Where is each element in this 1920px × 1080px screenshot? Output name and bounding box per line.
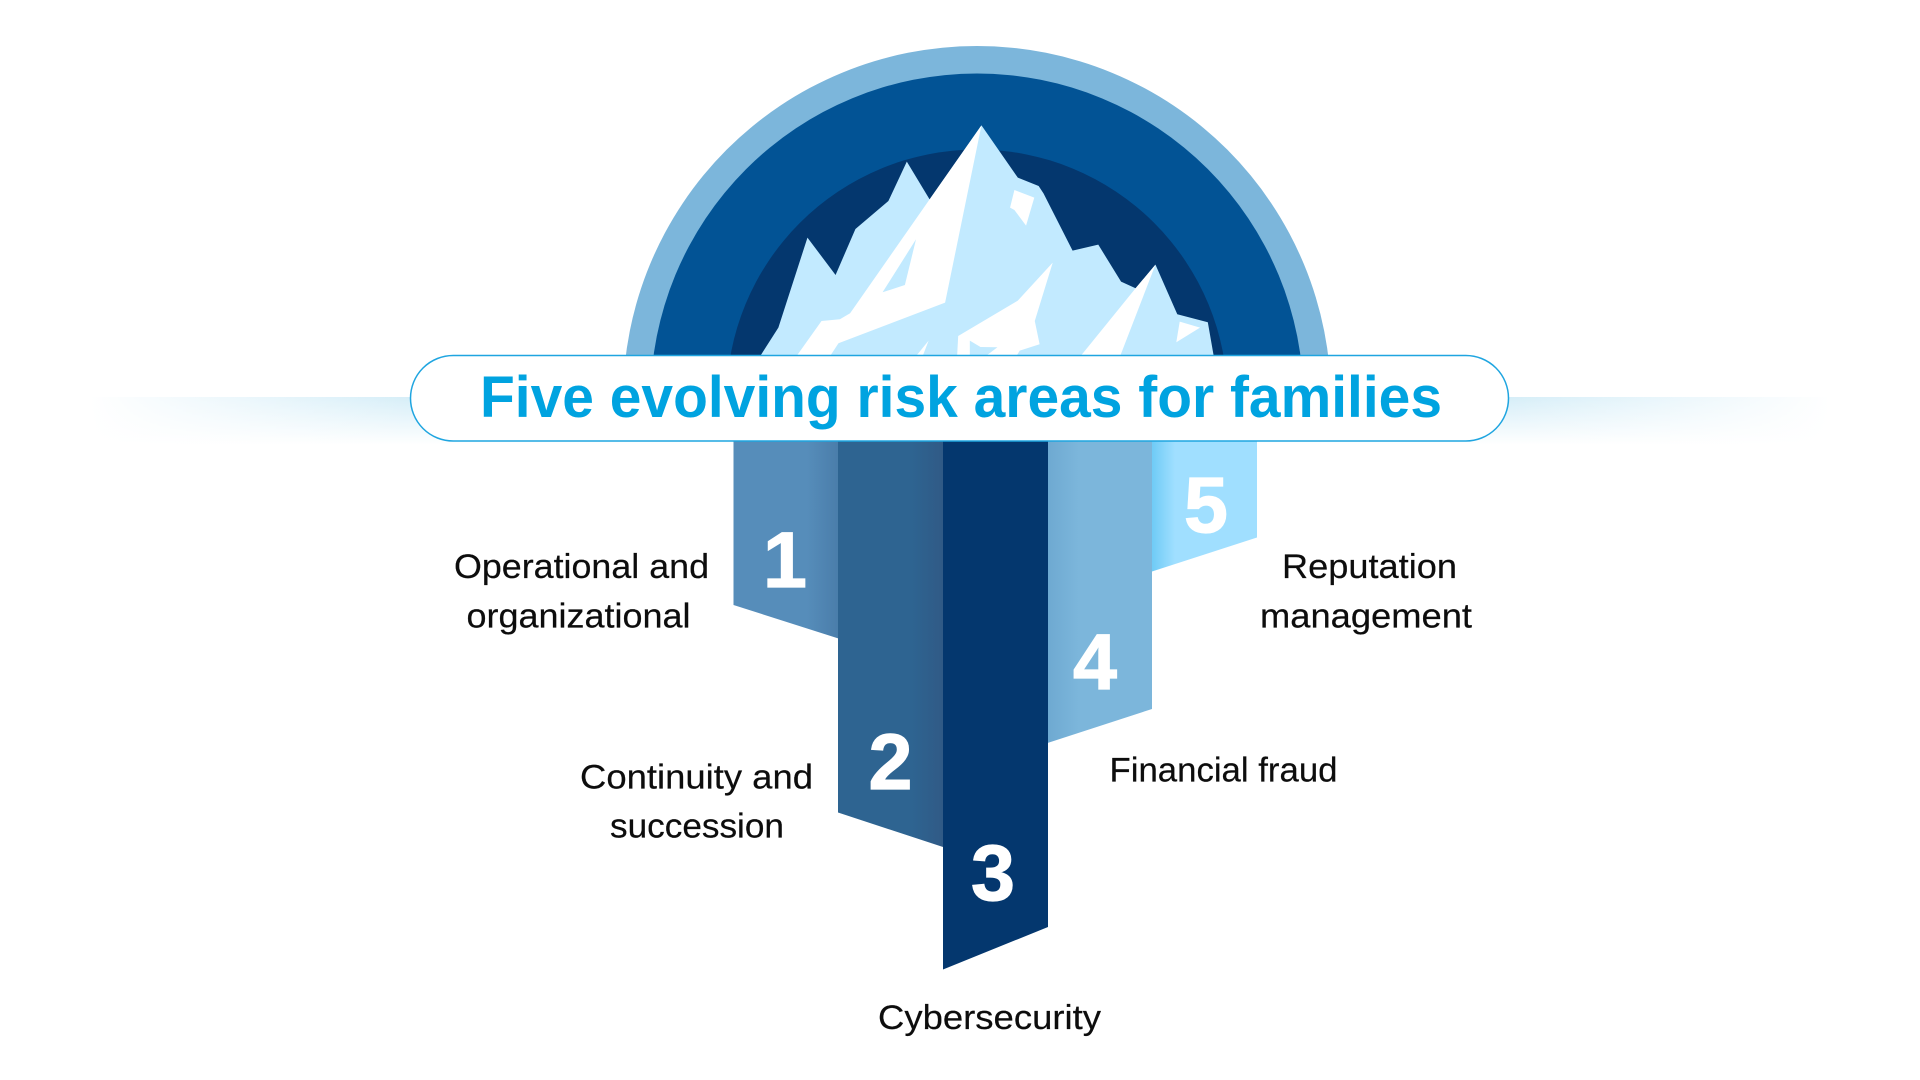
number 2: 2 <box>869 717 912 806</box>
ribbon 2 <box>838 441 943 847</box>
label: Financial fraud: Financial fraud <box>1110 752 1338 790</box>
label: Operational and organizational <box>454 548 709 636</box>
label: Operational and organizational: Operational and <box>454 548 709 586</box>
middle arc <box>654 74 1300 355</box>
number 1: 1 <box>763 515 807 604</box>
label: Cybersecurity: Cybersecurity <box>878 999 1101 1037</box>
label: Reputation management <box>1260 548 1473 636</box>
label: Reputation management: management <box>1260 598 1473 636</box>
ribbon 1 <box>734 441 838 638</box>
outer arc <box>626 46 1328 355</box>
number 4: 4 <box>1073 617 1117 706</box>
label: Continuity and succession: Continuity and <box>580 758 813 796</box>
label: Continuity and succession: succession <box>610 808 784 846</box>
number 5: 5 <box>1184 460 1228 549</box>
ribbons <box>734 441 1257 970</box>
ribbon 3 <box>943 441 1048 970</box>
dome <box>626 46 1328 355</box>
ribbon 4 <box>1048 441 1152 743</box>
title pill <box>410 356 1508 441</box>
iceberg peak <box>753 125 1216 367</box>
ribbon 5 <box>1152 441 1257 572</box>
label: Continuity and succession <box>580 758 813 846</box>
number 3: 3 <box>971 828 1015 917</box>
label: Operational and organizational: organizational <box>466 598 690 636</box>
inner arc <box>730 150 1224 355</box>
horizon glow <box>90 397 1830 445</box>
label: Reputation management: Reputation <box>1282 548 1457 586</box>
title: Five evolving risk areas for families <box>480 365 1442 430</box>
infographic <box>153 46 1768 1036</box>
